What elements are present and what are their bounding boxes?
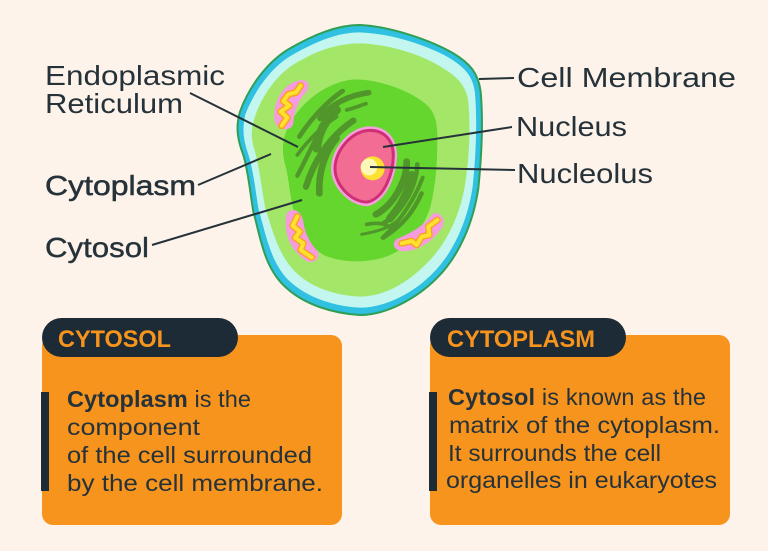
- heading pill: [430, 318, 626, 357]
- label: endoplasmic reticulum: Reticulum: [45, 88, 183, 119]
- cell diagram: [238, 25, 482, 315]
- body text: [446, 384, 720, 493]
- nucleus: [331, 126, 397, 206]
- label: cell membrane: Cell Membrane: [517, 62, 736, 93]
- mitochondrion bottom right: [394, 213, 444, 251]
- label: nucleus: Nucleus: [516, 111, 627, 142]
- line: cytosol: [152, 200, 302, 245]
- heading: CYTOPLASM: [447, 326, 595, 353]
- line: nucleolus: [370, 167, 515, 170]
- panel: cytosol: [41, 318, 342, 525]
- heading pill: [42, 318, 238, 357]
- cytoplasm light green: [252, 43, 469, 297]
- body text: [67, 386, 323, 496]
- panel background: [42, 335, 342, 525]
- body text: by the cell membrane.: [67, 470, 323, 496]
- mitochondrion bottom left: [286, 210, 319, 262]
- heading: CYTOSOL: [58, 326, 171, 353]
- panel: cytoplasm: [429, 318, 730, 525]
- pale inner membrane band: [243, 32, 476, 308]
- leader lines: [152, 78, 515, 245]
- panel background: [430, 335, 730, 525]
- cytosol mid green: [283, 79, 437, 261]
- body text: of the cell surrounded: [67, 442, 312, 468]
- body text: component: [67, 414, 201, 440]
- label: endoplasmic reticulum: Endoplasmic: [45, 60, 225, 91]
- endoplasmic reticulum right: [362, 162, 423, 238]
- label: cytosol: Cytosol: [45, 232, 149, 263]
- cell membrane outer wall: [238, 25, 482, 315]
- body text: matrix of the cytoplasm.: [449, 412, 720, 438]
- accent bar: [429, 392, 437, 491]
- body text: It surrounds the cell: [448, 440, 661, 466]
- body text: Cytosol is known as the: [448, 384, 706, 410]
- line: nucleus: [383, 127, 512, 147]
- accent bar: [41, 392, 49, 491]
- endoplasmic reticulum left: [297, 91, 369, 193]
- body text: organelles in eukaryotes: [446, 467, 717, 493]
- line: cell membrane: [479, 78, 514, 79]
- mitochondrion top left: [274, 80, 309, 129]
- body text: Cytoplasm is the: [67, 386, 251, 412]
- line: endoplasmic reticulum: [190, 93, 298, 147]
- line: cytoplasm: [198, 154, 271, 185]
- label: cytoplasm: Cytoplasm: [45, 170, 196, 201]
- nucleolus: [361, 156, 385, 180]
- label: nucleolus: Nucleolus: [517, 158, 653, 189]
- label: endoplasmic reticulum: [45, 60, 225, 119]
